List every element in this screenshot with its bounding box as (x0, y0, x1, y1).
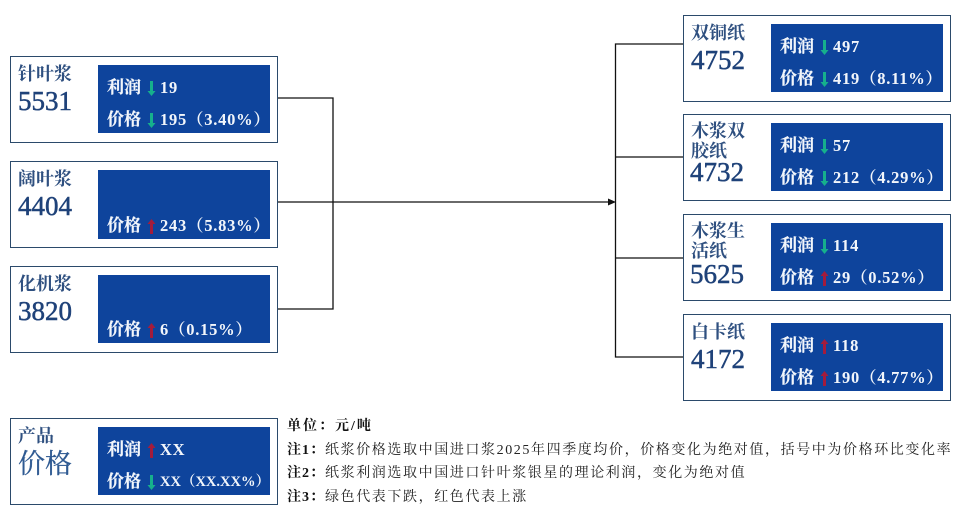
panel: 木浆生活纸 changes (771, 223, 943, 291)
value: 4404: 4404 (18, 191, 72, 221)
card: 木浆双胶纸 (683, 114, 951, 201)
panel: 白卡纸 changes (771, 323, 943, 391)
price row (107, 320, 253, 339)
value: 5625: 5625 (690, 259, 744, 289)
panel: 木浆生活纸 changes: 利润 (780, 236, 814, 255)
card: legend 产品 (10, 418, 278, 505)
value: 4172: 4172 (691, 344, 745, 374)
panel: 双铜纸 changes (771, 24, 943, 92)
profit row (780, 236, 859, 255)
price row (107, 472, 270, 491)
profit row (780, 37, 860, 56)
note 2: 注2：纸浆利润选取中国进口针叶浆银星的理论利润，变化为绝对值 (287, 466, 746, 481)
panel: 白卡纸 changes: 价格 (780, 368, 814, 387)
panel: 木浆生活纸 changes: 114 (833, 236, 859, 255)
panel: 木浆双胶纸 changes: 57 (833, 136, 851, 155)
panel: legend changes: XX (160, 440, 185, 459)
unit note: 单位：元/吨 (287, 419, 373, 434)
panel: 针叶浆 changes: 195（3.40%） (160, 110, 271, 129)
panel: 白卡纸 changes: 利润 (780, 336, 814, 355)
panel: 针叶浆 changes (98, 65, 270, 133)
panel: 木浆双胶纸 changes: 利润 (780, 136, 814, 155)
profit row (780, 136, 851, 155)
note 3: 注3：绿色代表下跌，红色代表上涨 (287, 490, 528, 505)
value: 4752: 4752 (691, 45, 745, 75)
price row (780, 368, 944, 387)
panel: 双铜纸 changes: 价格 (780, 69, 814, 88)
value: 4732: 4732 (690, 157, 744, 187)
label: 双铜纸: 双铜纸 (691, 23, 745, 43)
value: 5531: 5531 (18, 86, 72, 116)
panel: 木浆生活纸 changes: 29（0.52%） (833, 268, 935, 287)
panel: 木浆双胶纸 changes: 价格 (780, 168, 814, 187)
value: 3820: 3820 (18, 296, 72, 326)
panel: 化机浆 changes (98, 275, 270, 343)
panel: legend changes: 利润 (107, 440, 141, 459)
label: 价格: 价格 (18, 449, 72, 479)
panel: 木浆双胶纸 changes: 212（4.29%） (833, 168, 944, 187)
price row (780, 168, 944, 187)
price row (780, 69, 943, 88)
panel: 白卡纸 changes: 118 (833, 336, 859, 355)
card: 阔叶浆 (10, 161, 278, 248)
panel: 阔叶浆 changes (98, 170, 270, 239)
panel: 双铜纸 changes: 利润 (780, 37, 814, 56)
panel: 木浆双胶纸 changes (771, 123, 943, 191)
panel: 双铜纸 changes: 419（8.11%） (833, 69, 943, 88)
panel: 针叶浆 changes: 19 (160, 78, 178, 97)
panel: legend changes: 价格 (107, 472, 141, 491)
card: 化机浆 (10, 266, 278, 353)
label: 白卡纸: 白卡纸 (691, 322, 745, 342)
panel: legend changes: XX（XX.XX%） (160, 474, 270, 490)
profit row (780, 336, 859, 355)
label: 产品: 产品 (18, 426, 54, 446)
panel: 化机浆 changes: 6（0.15%） (160, 320, 253, 339)
panel: 白卡纸 changes: 190（4.77%） (833, 368, 944, 387)
panel: 木浆生活纸 changes: 价格 (780, 268, 814, 287)
note 1: 注1：纸浆价格选取中国进口浆2025年四季度均价，价格变化为绝对值，括号中为价格环比变化率 (287, 443, 952, 458)
price row (107, 216, 271, 235)
label: 针叶浆: 针叶浆 (18, 64, 72, 84)
card: 针叶浆 (10, 56, 278, 143)
panel: 阔叶浆 changes: 243（5.83%） (160, 216, 271, 235)
panel: 针叶浆 changes: 价格 (107, 110, 141, 129)
panel: 化机浆 changes: 价格 (107, 320, 141, 339)
price row (780, 268, 935, 287)
card: 双铜纸 (683, 15, 951, 102)
panel: 阔叶浆 changes: 价格 (107, 216, 141, 235)
panel: 针叶浆 changes: 利润 (107, 78, 141, 97)
label: 木浆双胶纸: 木浆双胶纸 (691, 121, 745, 161)
price row (107, 110, 271, 129)
card: 白卡纸 (683, 314, 951, 401)
label: 化机浆: 化机浆 (18, 274, 72, 294)
profit row (107, 78, 178, 97)
profit row (107, 440, 185, 459)
panel: legend changes (98, 427, 270, 495)
label: 木浆生活纸: 木浆生活纸 (691, 221, 745, 261)
panel: 双铜纸 changes: 497 (833, 37, 860, 56)
label: 阔叶浆: 阔叶浆 (18, 169, 72, 189)
card: 木浆生活纸 (683, 214, 951, 301)
